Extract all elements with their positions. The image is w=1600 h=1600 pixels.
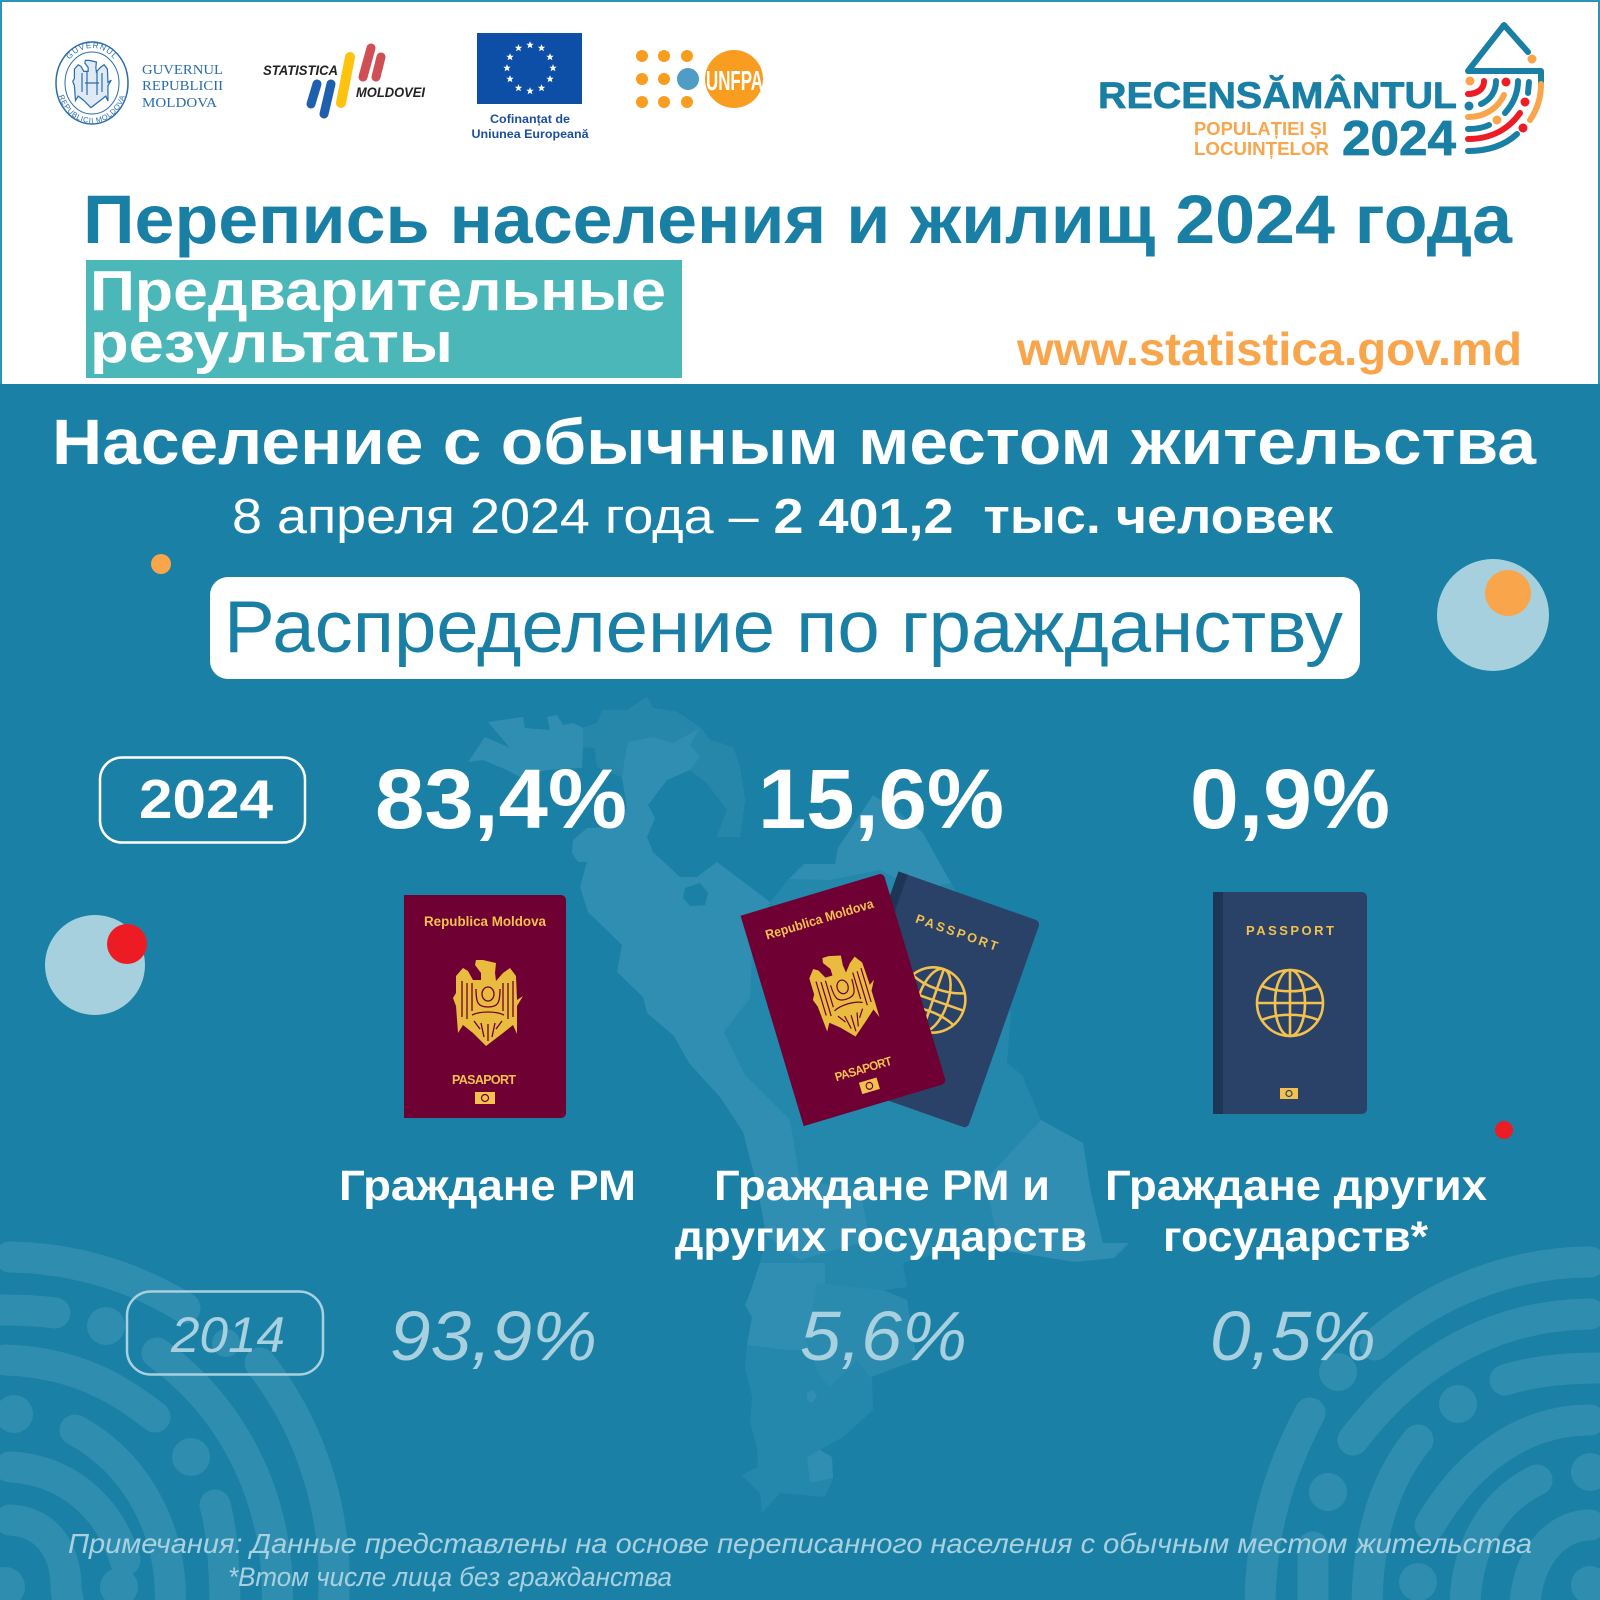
category labels: Граждане других [1105, 1162, 1487, 1210]
website: www.statistica.gov.md [1016, 323, 1522, 375]
logo: European Union flag: Uniunea Europeană [472, 127, 589, 141]
footnotes [68, 1528, 1532, 1592]
icon: foreign passport: PASSPORT [1246, 923, 1334, 938]
logo: Guvernul Republicii Moldova: MOLDOVA [142, 95, 217, 110]
category labels: Граждане РМ и [714, 1162, 1050, 1210]
logo: UNFPA: UNFPA [706, 65, 763, 96]
background arcs bottom-left [0, 1257, 334, 1600]
icon: Moldovan passport [404, 895, 566, 1118]
badge: preliminary results [86, 259, 682, 378]
values 2024: 83,4% [375, 752, 627, 846]
values 2014: 0,5% [1210, 1297, 1376, 1375]
icon: Moldovan passport in front: Republica Moldova [763, 895, 876, 943]
logo: Statistica Moldovei: MOLDOVEI [356, 84, 426, 100]
logo: UNFPA [636, 50, 763, 108]
section pill: distribution by citizenship: Распределение по гражданству [224, 587, 1344, 668]
values 2024 [375, 752, 1390, 846]
background arcs bottom-right [1260, 1262, 1600, 1600]
logo: Guvernul Republicii Moldova: GUVERNUL [142, 62, 223, 77]
header panel [0, 0, 1600, 384]
icon: Moldovan passport: Republica Moldova [424, 914, 546, 929]
year badge 2014: 2014 [170, 1307, 285, 1363]
subheading: population figure: 8 апреля 2024 года – 2 401,2 тыс. человек [232, 490, 1334, 544]
values 2014: 93,9% [390, 1297, 597, 1375]
title: Перепись населения и жилищ 2024 года [83, 181, 1513, 258]
logo: Recensământul 2024: POPULAȚIEI ȘI [1194, 119, 1327, 139]
heading: usual resident population: Население с обычным местом жительства [52, 406, 1536, 478]
category labels: Граждане РМ [339, 1162, 636, 1210]
logo: Guvernul Republicii Moldova: REPUBLICII MOLDOVA [59, 94, 125, 123]
icon: foreign passport [1213, 892, 1367, 1114]
category labels: других государств [675, 1213, 1087, 1261]
values 2024: 15,6% [758, 752, 1004, 846]
logo: European Union flag [472, 33, 589, 141]
icon: Moldovan passport: PASAPORT [452, 1073, 516, 1087]
values 2024: 0,9% [1190, 752, 1390, 846]
icon: Moldovan passport in front [741, 873, 946, 1126]
map of Moldova watermark [468, 697, 1129, 1513]
icon: Moldovan passport in front: PASAPORT [833, 1053, 894, 1084]
logo: Guvernul Republicii Moldova [55, 41, 224, 125]
values 2014 [390, 1297, 1376, 1375]
logo: Recensământul 2024: LOCUINȚELOR [1194, 139, 1329, 159]
badge: preliminary results: Предварительные [90, 259, 666, 323]
logo: Recensământul 2024 [1098, 25, 1541, 166]
logo: Guvernul Republicii Moldova: GUVERNUL [66, 42, 116, 59]
year badge 2014 [127, 1292, 323, 1374]
icon: foreign passport behind: PASSPORT [914, 911, 1000, 954]
footnotes: Примечания: Данные представлены на основе переписанного населения с обычным местом жительства [68, 1528, 1532, 1559]
values 2014: 5,6% [800, 1297, 967, 1375]
decorative dots [45, 554, 1549, 1139]
year badge 2024 [100, 758, 305, 842]
category labels [339, 1162, 1487, 1261]
footnotes: *Втом числе лица без гражданства [228, 1562, 672, 1592]
badge: preliminary results: результаты [90, 311, 453, 375]
logo: Recensământul 2024: RECENSĂMÂNTUL [1098, 74, 1457, 116]
logo: Statistica Moldovei: STATISTICA [263, 62, 338, 78]
logo: Guvernul Republicii Moldova: REPUBLICII [142, 78, 224, 93]
logo: European Union flag: Cofinanțat de [490, 112, 570, 126]
category labels: государств* [1163, 1213, 1428, 1261]
logo: Recensământul 2024: 2024 [1342, 112, 1456, 166]
year badge 2024: 2024 [139, 768, 273, 830]
logo: Statistica Moldovei [263, 48, 426, 114]
icon: foreign passport behind [826, 871, 1040, 1129]
